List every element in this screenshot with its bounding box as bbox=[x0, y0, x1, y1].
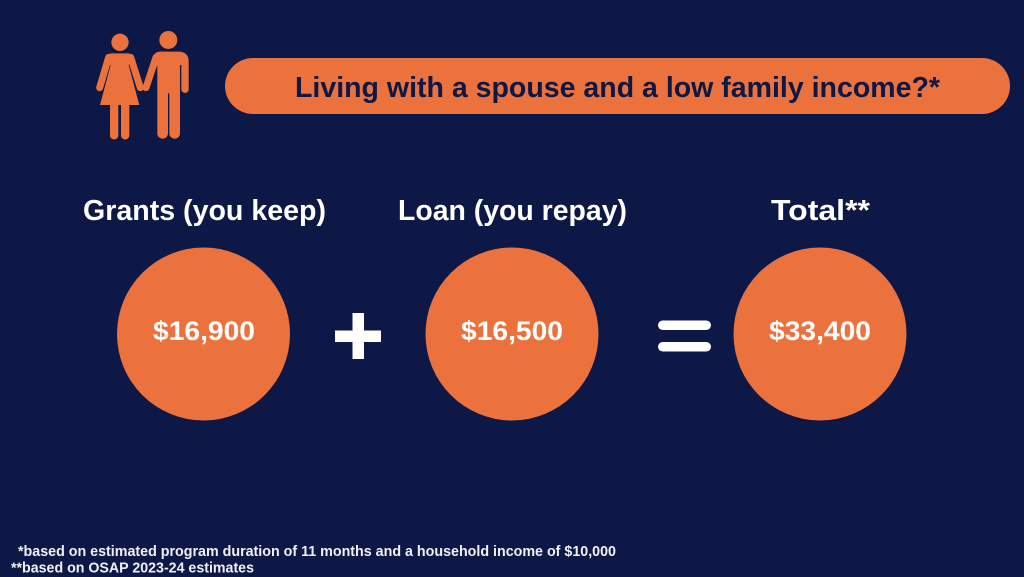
circle: loan amount bbox=[426, 248, 598, 420]
column label: loan: Loan (you repay) bbox=[398, 195, 627, 227]
icon: equals sign bbox=[658, 320, 711, 352]
circle: total amount: $33,400 bbox=[769, 316, 871, 346]
icon: plus sign bbox=[335, 313, 381, 359]
column label: total: Total** bbox=[771, 195, 871, 227]
heading banner bbox=[225, 58, 1010, 114]
column label: grants: Grants (you keep) bbox=[83, 195, 326, 227]
circle: grants amount: $16,900 bbox=[153, 316, 255, 346]
footnote: OSAP estimates: **based on OSAP 2023-24 estimates bbox=[11, 560, 254, 576]
footnote: program duration and income: *based on estimated program duration of 11 months and a household income of $10,000 bbox=[18, 543, 616, 560]
circle: loan amount: $16,500 bbox=[461, 316, 563, 346]
icon: couple holding hands bbox=[100, 31, 189, 139]
circle: total amount bbox=[734, 248, 906, 420]
circle: grants amount bbox=[117, 248, 290, 420]
heading banner: Living with a spouse and a low family income?* bbox=[295, 72, 941, 104]
